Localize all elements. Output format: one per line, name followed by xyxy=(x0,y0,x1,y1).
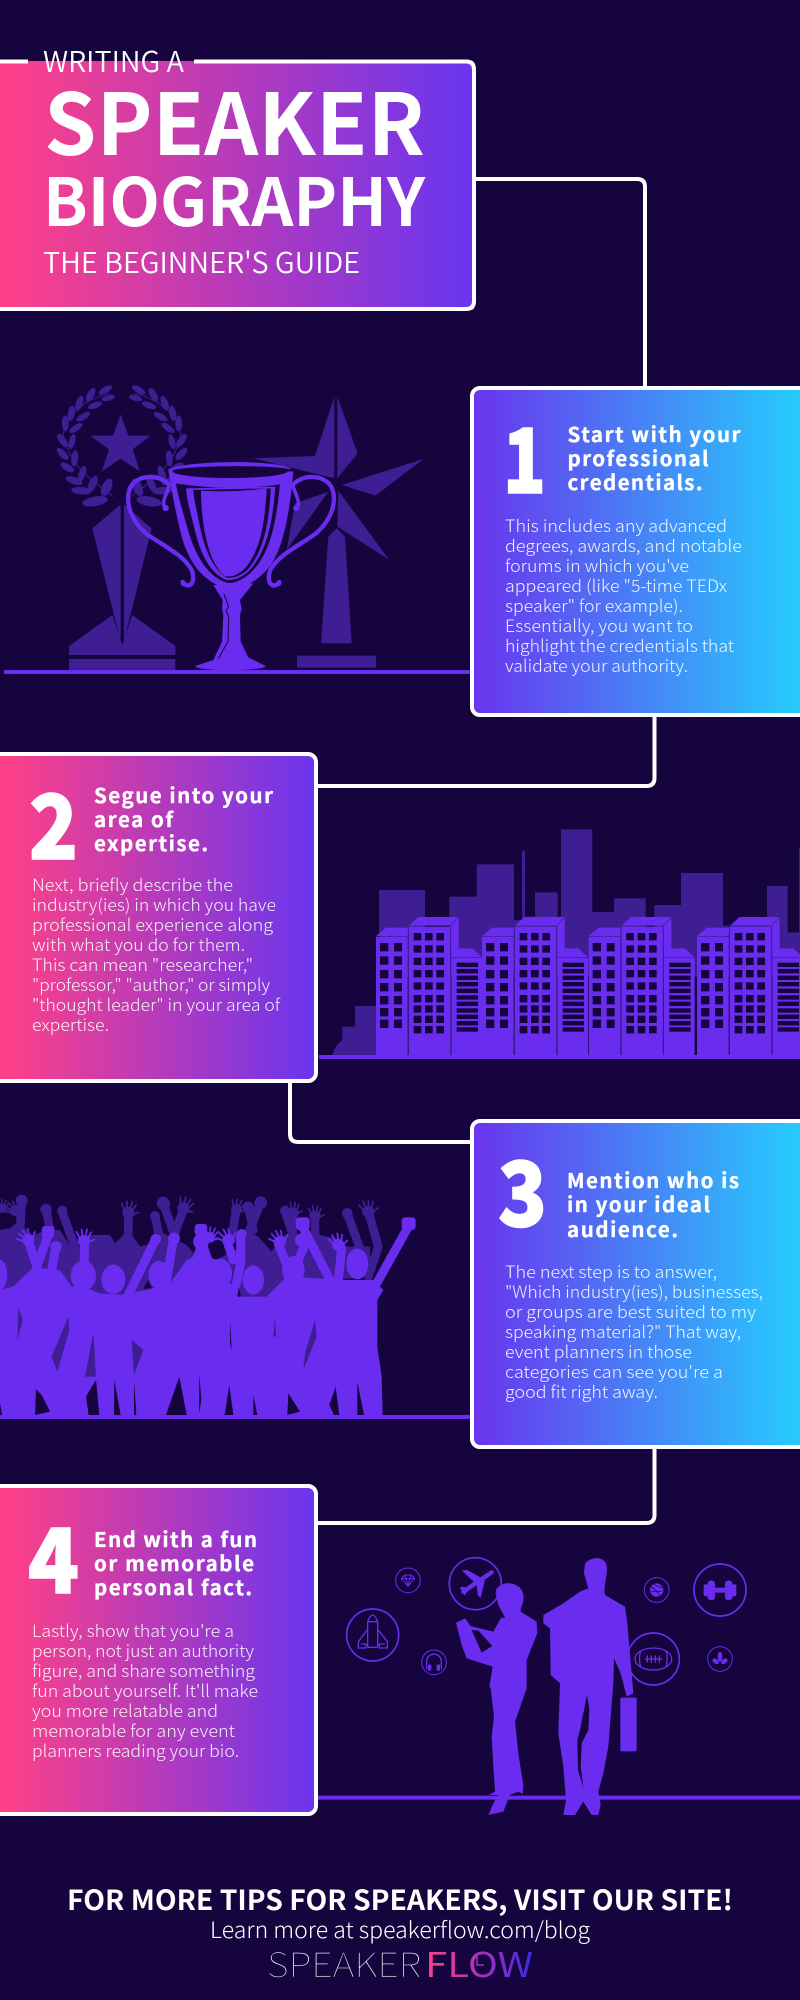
illustration: city skyline xyxy=(319,829,800,1059)
body 4: Lastly, show that you're a xyxy=(32,1618,234,1642)
step 1 card xyxy=(472,388,800,715)
wreath and star xyxy=(55,384,189,508)
icon: plane xyxy=(449,1558,501,1610)
heading 2: expertise. xyxy=(94,827,208,857)
illustration: cheering crowd xyxy=(0,1195,470,1419)
illustration: two professionals and hobby icons xyxy=(317,1558,800,1815)
body 3: The next step is to answer, xyxy=(505,1259,717,1283)
icon: dumbbell xyxy=(694,1564,746,1616)
heading 2: Segue into your xyxy=(94,779,273,809)
icon: diamond xyxy=(396,1568,420,1593)
logo: SpeakerFlow: FLOW xyxy=(425,1938,533,1987)
trophy cup xyxy=(128,463,334,670)
shelf xyxy=(4,670,470,674)
illustration: trophies xyxy=(4,384,470,674)
ground line xyxy=(319,1055,800,1059)
heading 1: credentials. xyxy=(568,466,702,496)
body 2: professional experience along xyxy=(32,912,273,936)
body 3: event planners in those xyxy=(505,1339,692,1363)
footer heading: FOR MORE TIPS FOR SPEAKERS, VISIT OUR SITE! xyxy=(67,1879,733,1919)
body 3: or groups are best suited to my xyxy=(505,1299,756,1323)
body 2: industry(ies) in which you have xyxy=(32,892,276,916)
body 2: "professor," "author," or simply xyxy=(32,972,270,996)
heading 2: area of xyxy=(94,803,174,833)
title: speaker: SPEAKER xyxy=(44,57,425,180)
body 1: speaker" for example). xyxy=(505,593,683,617)
silhouette: man xyxy=(543,1558,633,1815)
heading 1: Start with your xyxy=(568,418,741,448)
body 4: figure, and share something xyxy=(32,1658,255,1682)
heading 3: audience. xyxy=(567,1213,678,1243)
ground line xyxy=(0,1415,470,1419)
body 3: good fit right away. xyxy=(505,1379,658,1403)
number 3: 3 xyxy=(498,1122,547,1252)
body 3: speaking material?" That way, xyxy=(505,1319,741,1343)
body 4: planners reading your bio. xyxy=(32,1738,239,1762)
leg gaps xyxy=(0,1280,364,1415)
briefcase xyxy=(620,1698,637,1751)
footer link: Learn more at speakerflow.com/blog xyxy=(210,1913,590,1945)
body 4: fun about yourself. It'll make xyxy=(32,1678,258,1702)
connector: step 2 to step 3 xyxy=(290,1083,472,1142)
body 2: Next, briefly describe the xyxy=(32,872,233,896)
ground line xyxy=(317,1796,800,1800)
background crowd xyxy=(0,1195,379,1373)
number 1: 1 xyxy=(503,389,546,519)
title: biography: BIOGRAPHY xyxy=(43,150,426,246)
connector: step 3 to step 4 xyxy=(315,1449,654,1523)
body 1: degrees, awards, and notable xyxy=(505,533,742,557)
icon: leaves xyxy=(708,1647,732,1671)
body 4: memorable for any event xyxy=(32,1718,235,1742)
body 4: person, not just an authority xyxy=(32,1638,254,1662)
silhouette: woman xyxy=(456,1583,537,1815)
title: writing a: WRITING A xyxy=(43,39,185,81)
body 1: highlight the credentials that xyxy=(505,633,734,657)
body 1: forums in which you've xyxy=(505,553,689,577)
body 2: with what you do for them. xyxy=(32,932,245,956)
body 2: "thought leader" in your area of xyxy=(32,992,281,1016)
number 4: 4 xyxy=(28,1489,79,1619)
body 4: you more relatable and xyxy=(32,1698,218,1722)
heading 3: in your ideal xyxy=(567,1188,710,1218)
icon: football xyxy=(627,1633,679,1685)
body shadows xyxy=(17,1307,317,1377)
body 3: categories can see you're a xyxy=(505,1359,723,1383)
logo: SpeakerFlow xyxy=(267,1938,533,1987)
body 1: appeared (like "5-time TEDx xyxy=(505,573,727,597)
title panel xyxy=(0,39,474,310)
foreground buildings xyxy=(376,917,800,1055)
connector: title to step 1 xyxy=(474,179,645,388)
step 3 card xyxy=(472,1121,800,1447)
subtitle: THE BEGINNER'S GUIDE xyxy=(43,240,360,282)
logo: SpeakerFlow: SPEAKER xyxy=(267,1938,421,1987)
heading 4: or memorable xyxy=(94,1547,254,1577)
body 1: validate your authority. xyxy=(505,653,688,677)
background buildings xyxy=(333,829,800,1055)
body 2: This can mean "researcher," xyxy=(32,952,253,976)
connector: step 1 to step 2 xyxy=(315,717,654,786)
step 2 card xyxy=(0,754,316,1081)
left award xyxy=(69,504,175,670)
body 1: This includes any advanced xyxy=(505,513,727,537)
icon: rocket xyxy=(347,1609,399,1661)
foreground crowd xyxy=(0,1217,416,1415)
right award xyxy=(253,397,423,668)
body 2: expertise. xyxy=(32,1012,109,1036)
body 3: "Which industry(ies), businesses, xyxy=(505,1279,763,1303)
icon: headphones xyxy=(422,1650,446,1675)
body 1: Essentially, you want to xyxy=(505,613,693,637)
heading 4: personal fact. xyxy=(94,1571,252,1601)
heading 1: professional xyxy=(568,442,708,472)
icon: basketball xyxy=(644,1578,669,1602)
step 4 card xyxy=(0,1486,316,1814)
heading 3: Mention who is xyxy=(567,1164,739,1194)
heading 4: End with a fun xyxy=(94,1523,257,1553)
number 2: 2 xyxy=(29,755,78,885)
